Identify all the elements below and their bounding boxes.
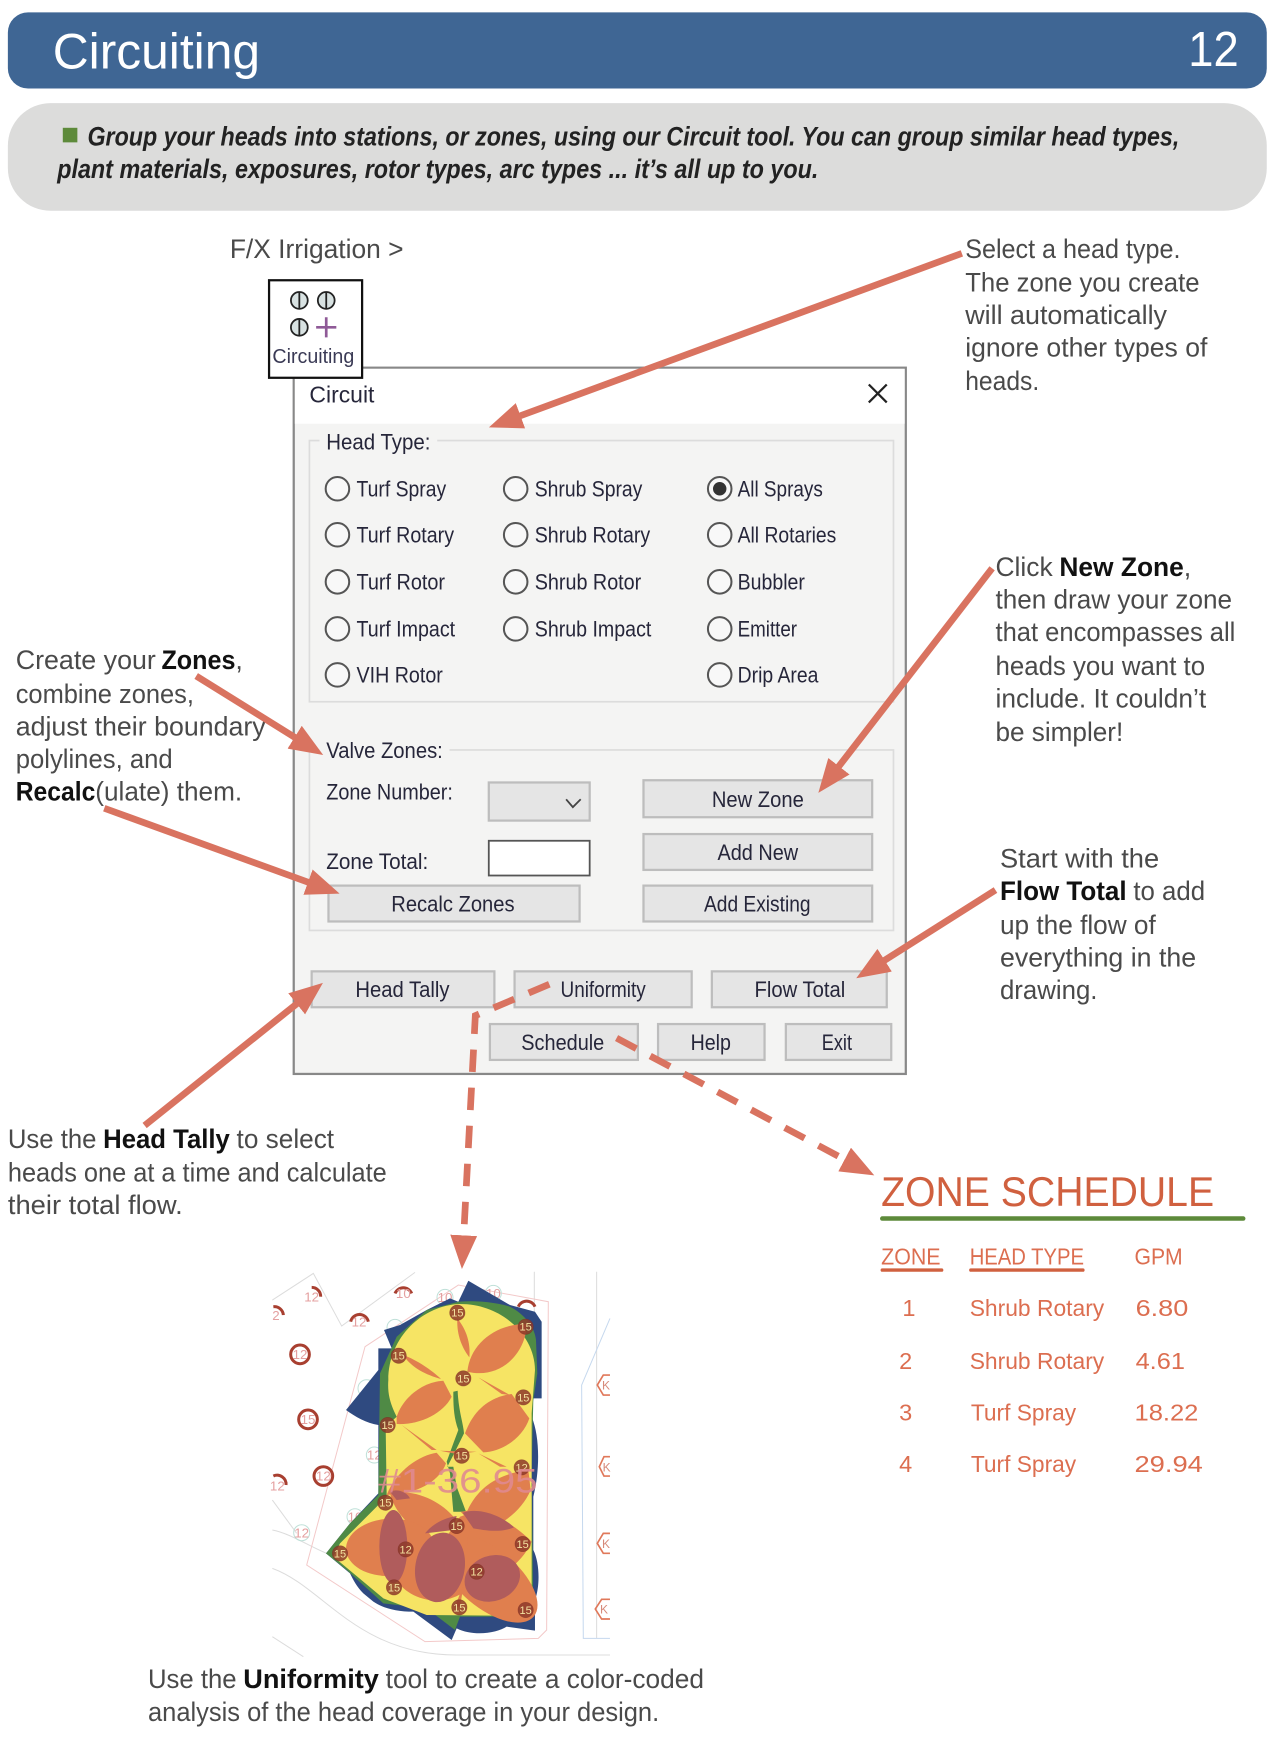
callout: zones: Zones — [161, 645, 235, 675]
uniformity coverage map: 15 — [388, 1582, 400, 1594]
callout: select a head type: will automatically — [964, 300, 1168, 330]
dialog buttons: Help — [691, 1030, 731, 1055]
dialog buttons: Uniformity — [561, 977, 646, 1002]
uniformity coverage map: 15 — [520, 1605, 532, 1617]
callout: flow total: up the flow of — [1000, 910, 1156, 940]
callout: flow total: drawing. — [1000, 975, 1097, 1005]
callout: new zone: that encompasses all — [995, 617, 1235, 647]
callout: uniformity: analysis of the head coverage in your design. — [148, 1697, 659, 1727]
callout: new zone: be simpler! — [995, 717, 1123, 747]
uniformity coverage map: K — [603, 1460, 611, 1474]
schedule table: 29.94 — [1134, 1451, 1203, 1477]
uniformity coverage map: 12 — [294, 1525, 309, 1540]
group: head type: Turf Spray — [357, 477, 446, 502]
intro panel — [8, 103, 1267, 211]
callout: new zone: then draw your zone — [995, 585, 1232, 615]
uniformity coverage map: 15 — [451, 1308, 463, 1320]
callout: new zone: Click — [995, 552, 1053, 582]
callout: new zone: include. It couldn’t — [995, 683, 1207, 713]
uniformity coverage map: 15 — [520, 1322, 532, 1334]
dialog buttons: Exit — [822, 1030, 852, 1055]
uniformity coverage map: 12 — [293, 1347, 307, 1362]
icon: circuiting toolbar button: Circuiting — [272, 346, 354, 368]
group: valve zones: Add New — [717, 840, 798, 865]
uniformity coverage map: 10 — [396, 1286, 411, 1301]
page number: 12 — [1188, 22, 1239, 77]
callout: zones: , — [235, 645, 243, 675]
callout: zones: adjust their boundary — [16, 711, 266, 741]
callout: head tally: to select — [237, 1124, 335, 1154]
callout: flow total: everything in the — [1000, 942, 1196, 972]
callout: select a head type: Select a head type. — [965, 234, 1180, 264]
arrow: to head tally — [145, 995, 307, 1126]
group: head type: All Sprays — [738, 477, 823, 502]
icon: close — [869, 385, 887, 402]
uniformity coverage map: 12 — [516, 1462, 528, 1474]
uniformity coverage map: 10 — [438, 1290, 452, 1305]
title: Circuiting — [53, 22, 260, 79]
uniformity coverage map: 15 — [393, 1351, 405, 1363]
group: head type: Shrub Spray — [535, 477, 642, 502]
callout: zones: (ulate) them. — [95, 776, 242, 806]
group: head type: Turf Rotor — [357, 570, 445, 595]
schedule table: 4.61 — [1136, 1348, 1185, 1374]
intro text: plant materials, exposures, rotor types, arc types ... it’s all up to you. — [56, 154, 818, 184]
schedule table: Shrub Rotary — [970, 1348, 1104, 1374]
group: head type — [309, 430, 893, 702]
callout: flow total: to add — [1133, 876, 1205, 906]
schedule table: Turf Spray — [971, 1451, 1076, 1477]
group: valve zones: Zone Total: — [326, 849, 428, 874]
schedule table: 6.80 — [1136, 1295, 1188, 1321]
group: head type: Shrub Rotary — [535, 523, 650, 548]
header bar — [8, 12, 1267, 89]
uniformity coverage map: 12 — [400, 1544, 412, 1556]
schedule table: 3 — [899, 1399, 912, 1425]
uniformity coverage map: 2 — [272, 1308, 280, 1323]
uniformity coverage map: 12 — [270, 1479, 285, 1494]
schedule table: 2 — [899, 1348, 912, 1374]
menu path label: F/X Irrigation > — [230, 234, 404, 264]
group: valve zones: Valve Zones: — [326, 738, 443, 763]
uniformity coverage map: 15 — [301, 1412, 315, 1427]
callout: head tally: Head Tally — [103, 1124, 230, 1154]
schedule table: 1 — [902, 1295, 916, 1321]
callout: select a head type: The zone you create — [965, 267, 1200, 297]
arrow: to recalc zones — [104, 808, 321, 887]
schedule table: 4 — [899, 1451, 912, 1477]
group: head type: Emitter — [738, 617, 797, 642]
uniformity coverage map: 15 — [517, 1539, 529, 1551]
callout: head tally: Use the — [8, 1124, 96, 1154]
dialog: Circuit — [294, 368, 906, 1074]
uniformity coverage map: 15 — [334, 1548, 346, 1560]
zone schedule — [881, 1168, 1243, 1477]
schedule table: Turf Spray — [971, 1399, 1076, 1425]
uniformity coverage map: 12 — [316, 1469, 331, 1484]
uniformity coverage map: 15 — [457, 1373, 469, 1385]
uniformity coverage map: 12 — [352, 1315, 366, 1330]
uniformity coverage map: #1-36.95 — [378, 1462, 538, 1500]
dialog buttons: Head Tally — [355, 977, 450, 1002]
group: head type: VIH Rotor — [357, 663, 443, 688]
group: head type: Drip Area — [738, 663, 819, 688]
group: valve zones: Zone Number: — [326, 779, 453, 804]
uniformity coverage map: 12 — [471, 1567, 483, 1579]
callout: zones: Create your — [16, 645, 156, 675]
arrow: to flow total — [873, 890, 995, 967]
group: valve zones — [309, 738, 893, 930]
dialog title: Circuit — [309, 381, 375, 407]
callout: uniformity: Use the — [148, 1664, 237, 1694]
group: head type: Head Type: — [326, 430, 430, 455]
group: head type: Turf Rotary — [357, 523, 454, 548]
arrow: to valve zones — [196, 676, 306, 744]
group: head type: Bubbler — [738, 570, 805, 595]
callout: head tally: heads one at a time and calculate — [8, 1158, 387, 1188]
uniformity coverage map: K — [602, 1537, 610, 1551]
callout: uniformity: Uniformity — [243, 1664, 379, 1694]
callout: new zone: , — [1184, 552, 1191, 582]
group: head type: Turf Impact — [357, 617, 455, 642]
uniformity coverage map — [270, 1272, 611, 1657]
uniformity coverage map: 10 — [348, 1509, 362, 1524]
uniformity coverage map: 15 — [379, 1498, 391, 1510]
dashed arrow: uniformity to map — [463, 984, 549, 1249]
uniformity coverage map: 15 — [517, 1392, 529, 1404]
arrow: to new zone — [831, 568, 992, 777]
uniformity coverage map: 15 — [382, 1420, 394, 1432]
callout: select a head type: heads. — [965, 366, 1039, 396]
group: valve zones: New Zone — [712, 787, 804, 812]
group: valve zones: Recalc Zones — [391, 891, 515, 916]
uniformity coverage map: 15 — [456, 1451, 468, 1463]
callout: zones: polylines, and — [16, 744, 173, 774]
group: head type: All Rotaries — [738, 523, 836, 548]
callout: head tally: their total flow. — [8, 1190, 183, 1220]
dialog buttons: Schedule — [521, 1030, 604, 1055]
callout: new zone: New Zone — [1059, 552, 1184, 582]
uniformity coverage map: K — [602, 1379, 610, 1393]
uniformity coverage map: 15 — [453, 1602, 465, 1614]
group: head type: Shrub Impact — [535, 617, 651, 642]
uniformity coverage map: 10 — [486, 1286, 501, 1301]
uniformity coverage map: K — [600, 1603, 608, 1617]
uniformity coverage map: 12 — [304, 1290, 319, 1305]
schedule table: HEAD TYPE — [970, 1244, 1084, 1270]
callout: select a head type: ignore other types of — [965, 332, 1208, 362]
dialog buttons: Flow Total — [754, 977, 845, 1002]
callout: new zone: heads you want to — [995, 651, 1205, 681]
callout: uniformity: tool to create a color-coded — [386, 1664, 704, 1694]
callout: flow total: Flow Total — [1000, 876, 1127, 906]
callout: zones: Recalc — [16, 776, 95, 806]
uniformity coverage map: 15 — [451, 1521, 463, 1533]
group: valve zones: Add Existing — [704, 891, 811, 916]
schedule table: Shrub Rotary — [970, 1295, 1104, 1321]
schedule heading: ZONE SCHEDULE — [881, 1168, 1214, 1215]
icon: circuiting toolbar button — [269, 280, 362, 378]
arrow: to head type — [508, 253, 962, 420]
dialog buttons — [312, 971, 891, 1060]
uniformity coverage map: 12 — [367, 1448, 382, 1463]
schedule table: ZONE — [881, 1244, 941, 1270]
icon: green bullet — [63, 128, 77, 142]
callout: flow total: Start with the — [1000, 844, 1159, 874]
schedule table: 18.22 — [1134, 1399, 1198, 1425]
schedule table — [881, 1244, 1203, 1477]
callout: zones: combine zones, — [16, 679, 194, 709]
schedule table: GPM — [1134, 1244, 1183, 1270]
group: head type: Shrub Rotor — [535, 570, 641, 595]
dashed arrow: schedule to zone schedule — [617, 1038, 856, 1166]
